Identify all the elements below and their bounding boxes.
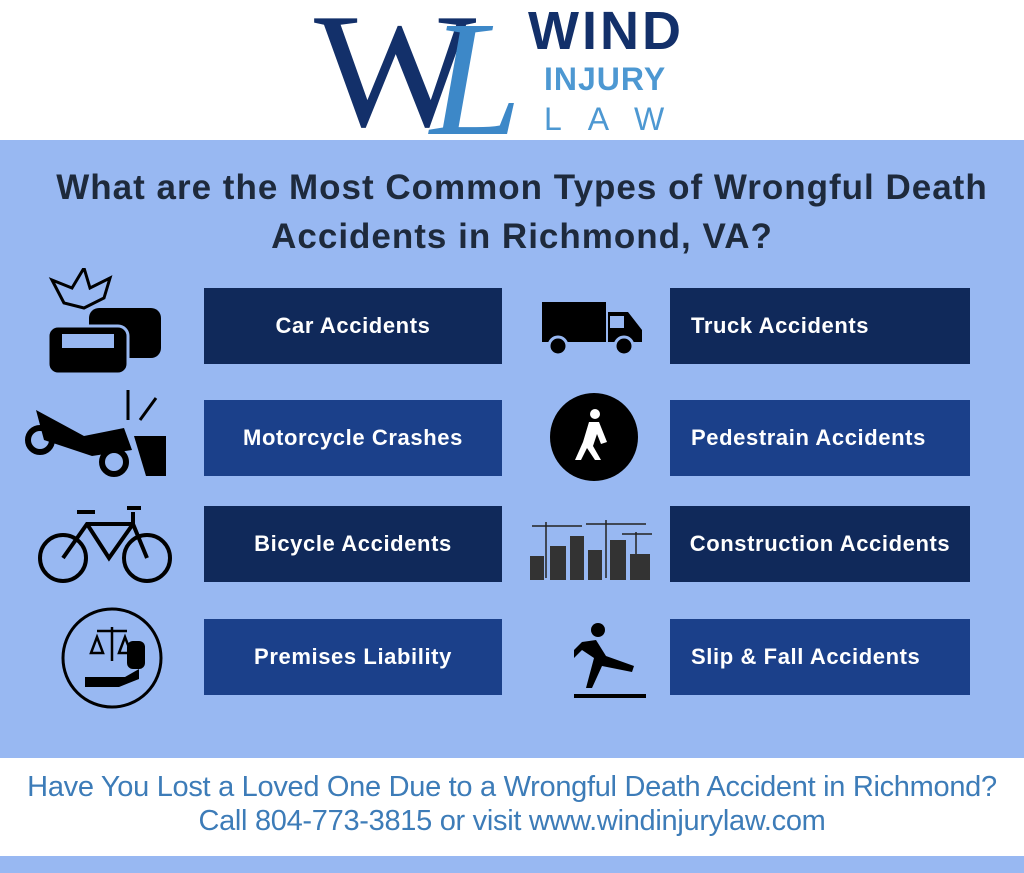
title <box>56 168 988 256</box>
box: pedestrian accidents: Pedestrain Accidents <box>691 425 926 450</box>
icon: WL monogram <box>314 0 522 170</box>
icon: car crash <box>48 268 161 372</box>
box: construction accidents: Construction Accidents <box>690 531 950 556</box>
title: What are the Most Common Types of Wrongful Death <box>56 168 988 207</box>
logo wordmark: LAW <box>544 101 690 137</box>
box: motorcycle crashes: Motorcycle Crashes <box>243 425 463 450</box>
box: bicycle accidents: Bicycle Accidents <box>254 531 452 556</box>
box: construction accidents <box>670 506 970 582</box>
icon: construction <box>530 520 652 580</box>
icon: bicycle <box>38 506 172 583</box>
box: truck accidents <box>670 288 970 364</box>
bottom bar <box>0 856 1024 873</box>
callout: call to action <box>27 771 997 837</box>
callout: call to action: Call 804-773-3815 or visit www.windinjurylaw.com <box>198 805 826 837</box>
box: car accidents <box>204 288 502 364</box>
box: car accidents: Car Accidents <box>276 313 430 338</box>
callout: call to action: Have You Lost a Loved One Due to a Wrongful Death Accident in Richmond? <box>27 771 997 803</box>
box: truck accidents: Truck Accidents <box>691 313 869 338</box>
title: Accidents in Richmond, VA? <box>271 217 773 256</box>
box: motorcycle crashes <box>204 400 502 476</box>
icon: slip and fall <box>574 623 646 698</box>
box: premises liability <box>204 619 502 695</box>
logo wordmark: INJURY <box>544 61 666 97</box>
box: pedestrian accidents <box>670 400 970 476</box>
box: bicycle accidents <box>204 506 502 582</box>
icon: truck <box>542 302 642 354</box>
icon: motorcycle crash <box>25 390 166 477</box>
panel: main blue background <box>0 140 1024 758</box>
box: slip & fall accidents <box>670 619 970 695</box>
icon: premises liability <box>62 608 162 708</box>
box: slip & fall accidents: Slip & Fall Accidents <box>691 644 920 669</box>
logo <box>314 0 690 140</box>
icon: pedestrian <box>550 393 638 481</box>
box: premises liability: Premises Liability <box>254 644 452 669</box>
logo wordmark: WIND <box>528 1 684 61</box>
logo wordmark <box>528 1 690 137</box>
